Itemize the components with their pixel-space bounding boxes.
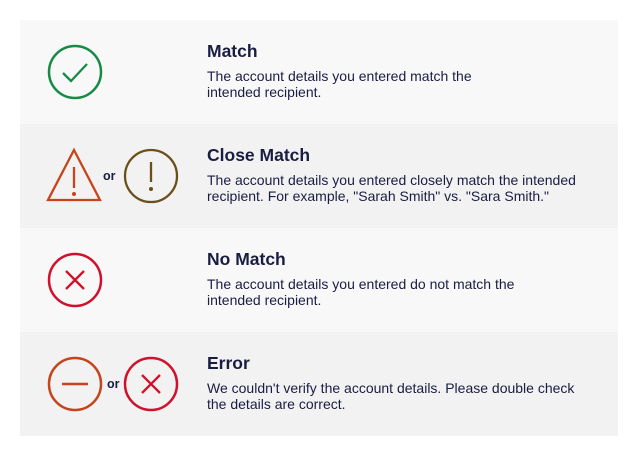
icon: check (48, 44, 102, 100)
icon: x (48, 252, 102, 308)
heading: Close Match (207, 145, 310, 165)
text: recipient. For example, "Sarah Smith" vs. "Sara Smith." (207, 188, 549, 204)
icons: minus and x (48, 356, 178, 412)
text (207, 68, 472, 100)
icons: warning (46, 148, 178, 204)
text: The account details you entered match the (207, 68, 472, 84)
text (207, 172, 576, 204)
heading: No Match (207, 249, 286, 269)
panel: close match (20, 124, 618, 228)
panel: no match (20, 228, 618, 332)
text: The account details you entered closely match the intended (207, 172, 576, 188)
text: The account details you entered do not match the (207, 276, 514, 292)
text: intended recipient. (207, 292, 321, 308)
text (207, 276, 514, 308)
text: the details are correct. (207, 396, 346, 412)
heading: Match (207, 41, 258, 61)
panel: match (20, 20, 618, 124)
text: intended recipient. (207, 84, 321, 100)
heading: Error (207, 353, 250, 373)
panel: error: or (107, 377, 120, 391)
panel: close match: or (103, 169, 116, 183)
text: We couldn't verify the account details. Please double check (207, 380, 574, 396)
panel: error (20, 332, 618, 436)
text (207, 380, 574, 412)
